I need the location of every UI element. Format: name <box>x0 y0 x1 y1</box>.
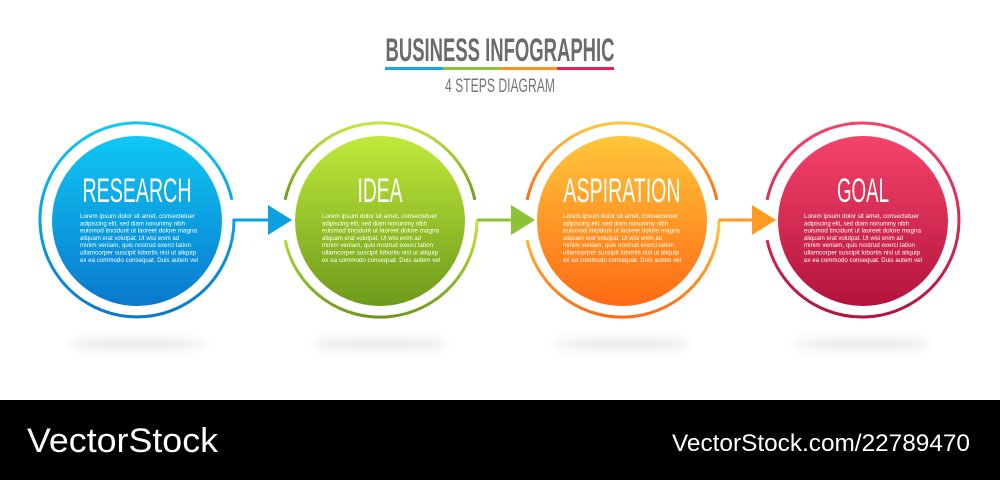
step 1: research <box>40 123 292 317</box>
step 3: aspiration: ASPIRATION <box>564 172 680 210</box>
step 3: aspiration: Lorem ipsum dolor sit amet, consectetuer <box>563 213 679 220</box>
step 2: idea: IDEA <box>358 172 403 210</box>
shadows <box>67 340 932 348</box>
step 2: idea <box>285 123 535 317</box>
step 1: research: RESEARCH <box>82 172 192 210</box>
step 1: research: Lorem ipsum dolor sit amet, consectetuer <box>80 213 196 220</box>
step 3: aspiration: minim veniam, quis nostrud exerci tation <box>563 242 674 249</box>
step 4: goal <box>767 123 959 317</box>
step 3: aspiration: adipiscing elit, sed diam nonummy nibh <box>563 220 668 227</box>
step 2: idea: ullamcorper suscipit lobortis nisl ut aliquip <box>322 250 438 256</box>
step 4: goal: adipiscing elit, sed diam nonummy nibh <box>804 220 909 227</box>
step 4: goal: Lorem ipsum dolor sit amet, consectetuer <box>804 213 920 220</box>
step 2: idea: aliquam erat volutpat. Ut wisi enim ad <box>322 235 421 242</box>
step 3: aspiration: aliquam erat volutpat. Ut wisi enim ad <box>563 235 662 242</box>
subtitle: 4 STEPS DIAGRAM <box>445 76 555 97</box>
step 1: research: minim veniam, quis nostrud exerci tation <box>80 242 191 249</box>
title: BUSINESS INFOGRAPHIC <box>386 32 614 68</box>
step 1: research: ex ea commodo consequat. Duis autem vel <box>80 257 198 264</box>
step 3: aspiration: euismod tincidunt ut laoreet dolore magna <box>563 228 680 235</box>
step 1: research: aliquam erat volutpat. Ut wisi enim ad <box>80 235 179 242</box>
arrow 1 <box>268 205 292 235</box>
step 1: research: euismod tincidunt ut laoreet dolore magna <box>80 228 197 235</box>
step 3: aspiration: ex ea commodo consequat. Duis autem vel <box>563 257 681 264</box>
footer band: VectorStock <box>27 422 219 460</box>
title <box>385 32 614 70</box>
step 4: goal: euismod tincidunt ut laoreet dolore magna <box>804 228 921 235</box>
step 4: goal: ex ea commodo consequat. Duis autem vel <box>804 257 922 264</box>
step 2: idea: adipiscing elit, sed diam nonummy nibh <box>322 220 427 227</box>
step 1: research: adipiscing elit, sed diam nonummy nibh <box>80 220 185 227</box>
footer band <box>0 400 1000 480</box>
arrow 2 <box>511 205 535 235</box>
step 2: idea: euismod tincidunt ut laoreet dolore magna <box>322 228 439 235</box>
step 4: goal: ullamcorper suscipit lobortis nisl ut aliquip <box>804 250 920 256</box>
step 1: research: ullamcorper suscipit lobortis nisl ut aliquip <box>80 250 196 256</box>
step 4: goal: aliquam erat volutpat. Ut wisi enim ad <box>804 235 903 242</box>
step 3: aspiration: ullamcorper suscipit lobortis nisl ut aliquip <box>563 250 679 256</box>
footer band: VectorStock.com/22789470 <box>672 430 970 457</box>
step 2: idea: ex ea commodo consequat. Duis autem vel <box>322 257 440 264</box>
step 2: idea: minim veniam, quis nostrud exerci tation <box>322 242 433 249</box>
step 4: goal: GOAL <box>837 172 889 210</box>
step 3: aspiration <box>527 123 776 317</box>
step 4: goal: minim veniam, quis nostrud exerci tation <box>804 242 915 249</box>
step 2: idea: Lorem ipsum dolor sit amet, consectetuer <box>322 213 438 220</box>
arrow 3 <box>752 205 776 235</box>
